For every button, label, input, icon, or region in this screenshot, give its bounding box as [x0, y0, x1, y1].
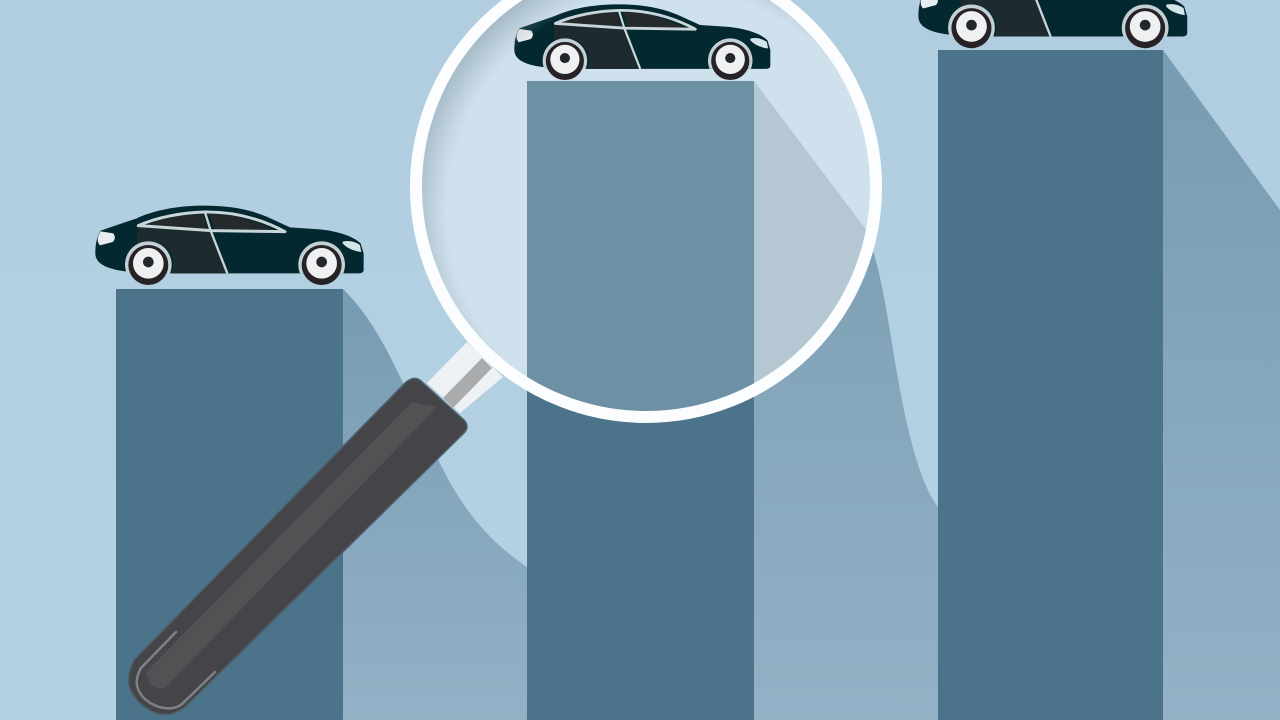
- lens: [422, 0, 870, 411]
- bar 1: [116, 289, 343, 720]
- magnifying glass: [128, 0, 890, 714]
- bar 2: [527, 81, 754, 720]
- handle: [128, 378, 467, 714]
- magnified shadow: [754, 81, 866, 383]
- bar shadow 2: [754, 81, 938, 720]
- car 2: [514, 4, 770, 80]
- handle rim: [137, 632, 215, 708]
- neck strip: [443, 358, 492, 408]
- car 1: [95, 206, 364, 285]
- bar shadow 1: [343, 289, 527, 720]
- neck: [427, 342, 503, 413]
- bar 3: [938, 50, 1163, 720]
- handle facet: [146, 402, 437, 688]
- bar shadow 3: [1163, 50, 1280, 720]
- car 3: [918, 0, 1187, 48]
- lens inner shade: [422, 0, 798, 332]
- magnified bar: [527, 81, 754, 431]
- lens ring: [416, 0, 876, 417]
